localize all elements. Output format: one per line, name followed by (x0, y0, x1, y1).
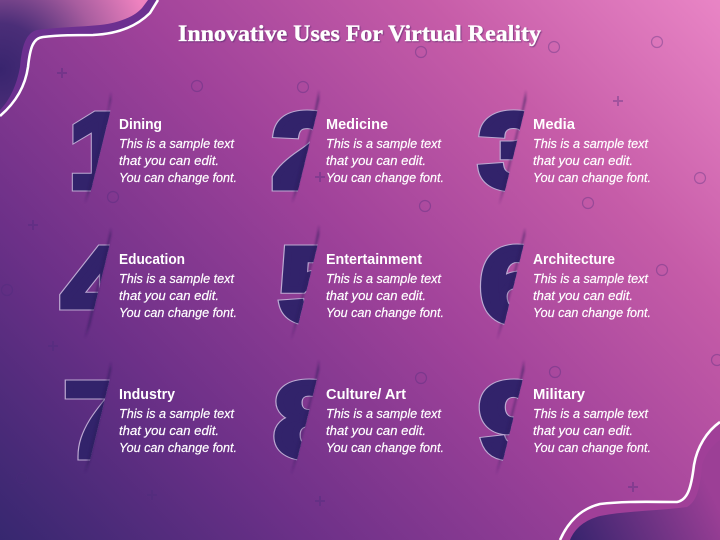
slit (292, 90, 319, 203)
body text: that you can edit. (119, 153, 219, 168)
body text: You can change font. (533, 305, 651, 320)
number 9 (478, 378, 523, 461)
heading: Culture/ Art (326, 387, 406, 403)
slit (291, 225, 319, 340)
item 9: Military (479, 360, 651, 479)
body text: that you can edit. (533, 288, 633, 303)
number 3: 3 (479, 92, 550, 210)
heading: Dining (119, 117, 162, 133)
heading: Entertainment (326, 252, 422, 268)
body text: You can change font. (533, 440, 651, 455)
body text: This is a sample text (119, 136, 235, 151)
body text (533, 136, 651, 185)
body text: You can change font. (326, 305, 444, 320)
heading: Media (533, 117, 576, 133)
top-left corner wave (0, 0, 158, 116)
number 7: 7 (64, 361, 135, 479)
body text: This is a sample text (326, 406, 442, 421)
body text: This is a sample text (119, 406, 235, 421)
body text (119, 271, 237, 320)
heading: Industry (119, 387, 175, 403)
item 3: Media (479, 90, 651, 210)
number 9: 9 (479, 361, 550, 479)
body text: that you can edit. (533, 423, 633, 438)
body text: You can change font. (119, 305, 237, 320)
number 5: 5 (279, 226, 350, 344)
number 9: 9 (479, 361, 550, 479)
slit (85, 228, 111, 338)
body text: that you can edit. (533, 153, 633, 168)
body text: This is a sample text (533, 271, 649, 286)
body text: This is a sample text (533, 406, 649, 421)
body text (119, 136, 237, 185)
slit (85, 92, 111, 203)
body text: that you can edit. (119, 423, 219, 438)
body text: This is a sample text (119, 271, 235, 286)
bottom-right corner wave (560, 422, 720, 540)
number 4 (59, 244, 110, 310)
number 1: 1 (69, 93, 131, 211)
item 8: Culture/ Art (273, 362, 443, 469)
number 6 (480, 244, 524, 325)
number 6: 6 (480, 226, 551, 344)
number 4: 4 (62, 226, 133, 344)
body text: You can change font. (119, 170, 237, 185)
item 5: Entertainment (279, 225, 444, 344)
number 8: 8 (274, 361, 345, 479)
item 4: Education (59, 229, 236, 334)
number 7 (64, 380, 110, 460)
number 2: 2 (272, 92, 343, 210)
body text: You can change font. (119, 440, 237, 455)
number 2: 2 (272, 92, 343, 210)
number 1 (72, 110, 110, 192)
body text (326, 406, 444, 455)
heading: Military (533, 387, 585, 403)
number 4: 4 (62, 226, 133, 344)
body text: that you can edit. (326, 153, 426, 168)
slit (496, 360, 524, 475)
body text: that you can edit. (326, 423, 426, 438)
item 7: Industry (64, 364, 236, 468)
body text: that you can edit. (119, 288, 219, 303)
number 7: 7 (64, 361, 135, 479)
slit (497, 228, 525, 340)
item 1: Dining (72, 94, 236, 200)
heading: Architecture (533, 252, 615, 268)
body text: You can change font. (533, 170, 651, 185)
slit (85, 362, 111, 473)
item 2: Medicine (272, 90, 444, 210)
number 6: 6 (480, 226, 551, 344)
body text (533, 271, 651, 320)
slit (499, 90, 526, 205)
body text: This is a sample text (533, 136, 649, 151)
body text (119, 406, 237, 455)
body text: This is a sample text (326, 136, 442, 151)
body text (533, 406, 651, 455)
heading: Education (119, 252, 185, 268)
body text: You can change font. (326, 170, 444, 185)
body text: that you can edit. (326, 288, 426, 303)
number 8: 8 (274, 361, 345, 479)
number 8 (273, 378, 317, 460)
body text (326, 271, 444, 320)
body text (326, 136, 444, 185)
body text: This is a sample text (326, 271, 442, 286)
slit (291, 360, 319, 475)
number 1: 1 (69, 93, 131, 211)
number 5 (277, 244, 318, 324)
item 6: Architecture (480, 226, 651, 344)
number 3 (476, 109, 524, 192)
number 5: 5 (279, 226, 350, 344)
number 3: 3 (479, 92, 550, 210)
title: Innovative Uses For Virtual Reality (178, 21, 542, 46)
heading: Medicine (326, 117, 388, 133)
number 2 (272, 110, 318, 192)
body text: You can change font. (326, 440, 444, 455)
